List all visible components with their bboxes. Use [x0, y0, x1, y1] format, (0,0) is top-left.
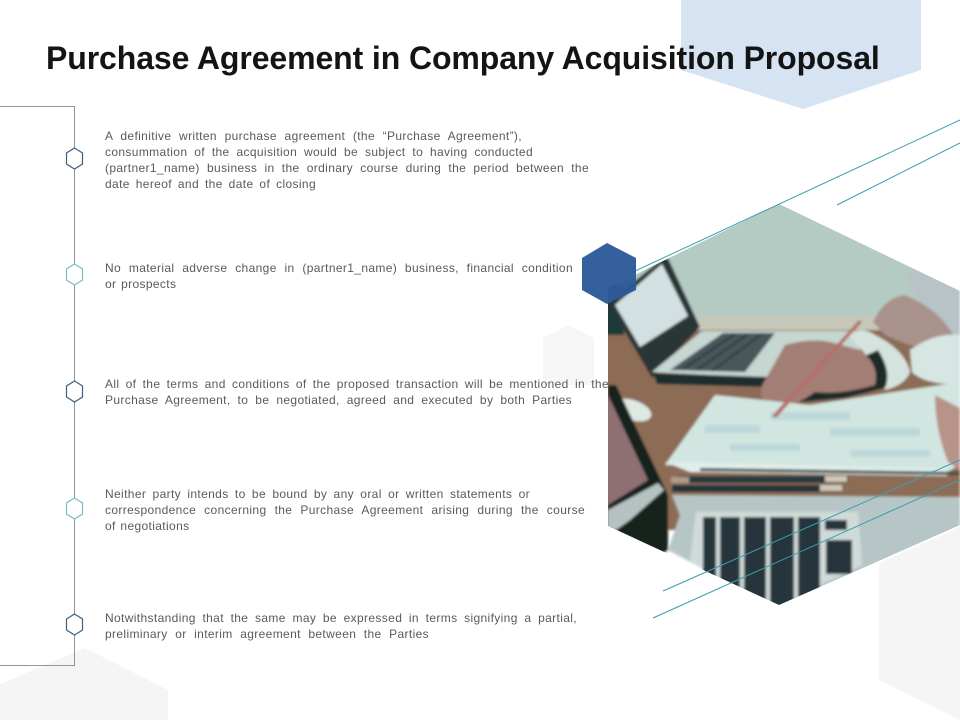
- text block 4: [105, 487, 585, 533]
- teal diagonal line upper short: [837, 143, 960, 205]
- timeline hexagon marker 4: [66, 498, 82, 519]
- bottom left gray hexagon: [0, 648, 168, 720]
- timeline hexagon marker 1: [66, 148, 82, 169]
- text block 5: Notwithstanding that the same may be expressed in terms signifying a partial,: [105, 611, 577, 625]
- text block 3: All of the terms and conditions of the proposed transaction will be mentioned in the: [105, 377, 609, 391]
- text block 4: Neither party intends to be bound by any oral or written statements or: [105, 487, 530, 501]
- text block 1: date hereof and the date of closing: [105, 177, 316, 191]
- text block 1: consummation of the acquisition would be subject to having conducted: [105, 145, 533, 159]
- text block 3: Purchase Agreement, to be negotiated, agreed and executed by both Parties: [105, 393, 572, 407]
- dark blue accent hexagon: [582, 243, 636, 304]
- text block 1: [105, 129, 589, 191]
- timeline frame line: [0, 106, 74, 666]
- text block 5: preliminary or interim agreement between the Parties: [105, 627, 429, 641]
- bottom right gray hexagon: [879, 527, 960, 720]
- text block 1: (partner1_name) business in the ordinary course during the period between the: [105, 161, 589, 175]
- title: Purchase Agreement in Company Acquisition Proposal: [46, 40, 880, 76]
- hexagon photo: desk with laptops and hands writing: [600, 200, 960, 610]
- text block 4: correspondence concerning the Purchase Agreement arising during the course: [105, 503, 585, 517]
- timeline hexagon marker 2: [66, 264, 82, 285]
- teal diagonal line upper long: [620, 120, 960, 278]
- text block 4: of negotiations: [105, 519, 189, 533]
- text block 2: or prospects: [105, 277, 176, 291]
- text block 1: A definitive written purchase agreement (the “Purchase Agreement”),: [105, 129, 522, 143]
- top right light blue hexagon: [681, 0, 921, 109]
- text block 2: No material adverse change in (partner1_name) business, financial condition: [105, 261, 573, 275]
- teal diagonal line lower two: [653, 480, 960, 618]
- text block 3: [105, 377, 609, 407]
- text block 2: [105, 261, 573, 291]
- timeline hexagon marker 5: [66, 614, 82, 635]
- timeline hexagon marker 3: [66, 381, 82, 402]
- text block 5: [105, 611, 577, 641]
- center gray hexagon: [543, 325, 594, 385]
- teal diagonal line lower one: [663, 460, 960, 591]
